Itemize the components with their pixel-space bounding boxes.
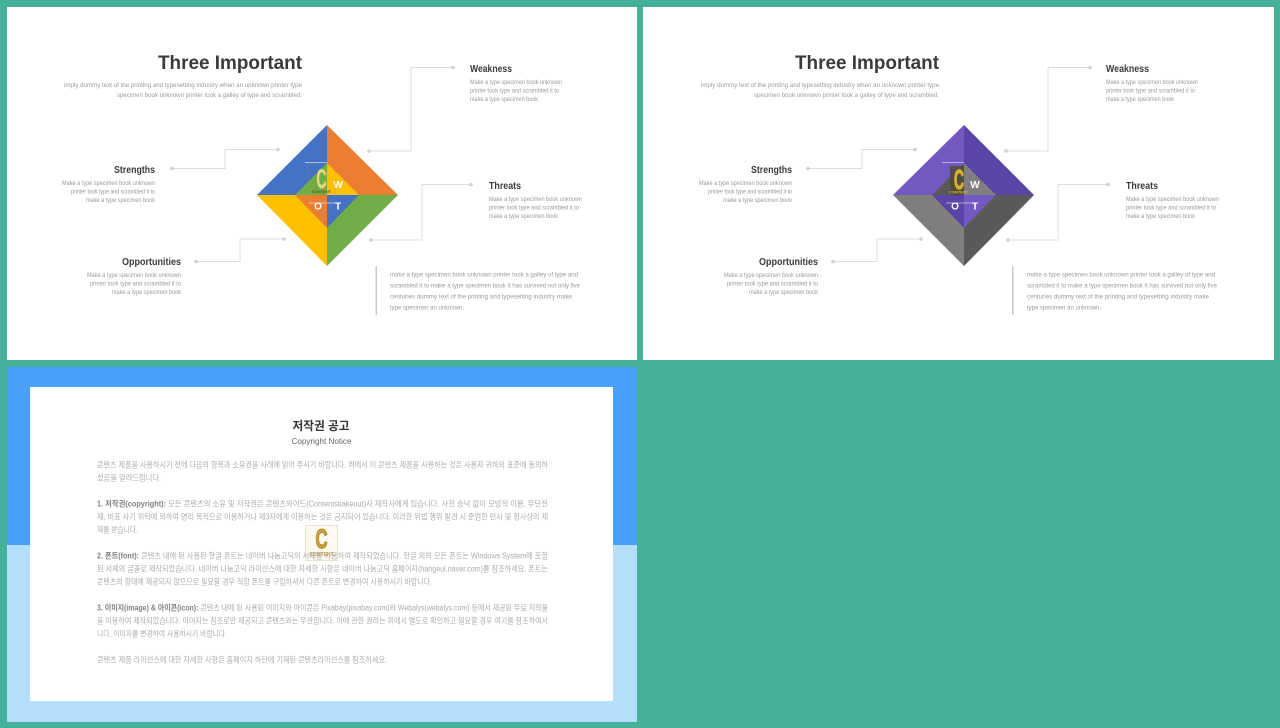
connector: weakness	[1004, 66, 1092, 153]
watermark logo: CONTENT	[309, 552, 334, 558]
notice body text: 니다. 이미지를 변경하여 사용하시기 바랍니다.	[97, 628, 227, 638]
watermark logo	[942, 162, 973, 203]
connector: strengths	[806, 148, 917, 170]
label: Weakness	[1106, 64, 1198, 103]
watermark logo: CONTENT	[949, 190, 969, 194]
note with side rule: scrambled it to make a type specimen book It has survived not only five	[1027, 282, 1217, 290]
panel: colourful SWOT slide	[7, 7, 637, 360]
label: Threats	[1126, 181, 1219, 220]
note with side rule: type specimen an unknown.	[1027, 304, 1101, 312]
connector: opportunities	[194, 237, 286, 263]
label: Threats: Threats	[489, 181, 521, 192]
notice body text: 재, 비표 사기 위탁에 의하여 영리 목적으로 이용하거나 제3자에게 이용하는 것은 금지되어 있습니다. 이러한 위법 행위 발견 시 준엄한 민사 및 형사상의 제	[97, 512, 548, 522]
intro text: imply dummy text of the printing and typesetting industry when an unknown printer type	[701, 82, 939, 89]
SWOT diamond	[893, 125, 1034, 266]
connector: opportunities	[831, 237, 923, 263]
connector: threats	[1006, 183, 1110, 242]
intro text: specimen book unknown printer took a galley of type and scrambled.	[754, 92, 939, 99]
label: Strengths: make a type specimen book	[723, 197, 793, 204]
notice body text: 1. 저작권(copyright): 모든 콘텐츠의 소유 및 저작권은 콘텐츠와이드(Contentstiakeout)사 제작사에게 있습니다. 사전 승낙 없이 모방적 이용, 무단전	[97, 498, 548, 508]
note with side rule: make a type specimen book unknown printer took a galley of type and	[390, 272, 578, 278]
intro text	[701, 82, 939, 99]
label: Threats	[489, 181, 582, 220]
label: Opportunities	[724, 257, 819, 296]
heading: Three Important: Three Important	[158, 53, 303, 74]
label: Opportunities: Opportunities	[759, 257, 818, 268]
SWOT diamond	[257, 125, 398, 266]
label: Opportunities: Make a type specimen book unknown	[87, 272, 181, 279]
connector: weakness	[367, 66, 455, 153]
label: Threats: make a type specimen book	[1126, 213, 1196, 220]
intro text	[64, 82, 302, 99]
letter O: O	[314, 202, 322, 212]
connector: strengths	[170, 148, 280, 170]
label: Strengths: printer took type and scrambled it to	[71, 188, 155, 196]
label: Strengths: make a type specimen book	[86, 197, 156, 204]
label: Threats: printer took type and scrambled it to	[1126, 204, 1216, 212]
watermark logo: C	[316, 524, 328, 554]
label: Strengths: printer took type and scrambled it to	[708, 188, 792, 196]
notice body text: 2. 폰트(font): 콘텐츠 내에 된 사용된 한글 폰트는 네이버 나눔고딕의 서체를 사용하여 제작되었습니다. 한글 외의 모든 폰트는 Windows System에 포함	[97, 550, 549, 560]
notice body text: 콘텐츠 제품을 사용하시기 전에 다음의 항목과 소유권을 사례에 읽어 주시기 바랍니다. 위에서 이 콘텐츠 제품을 사용하는 것은 사용자 귀하의 표준에 동의하	[97, 460, 549, 470]
heading: Three Important: Three Important	[795, 53, 940, 74]
label: Opportunities: printer took type and scrambled it to	[90, 280, 181, 288]
watermark logo: C	[954, 164, 964, 195]
note with side rule	[1012, 266, 1217, 315]
label: Strengths	[62, 165, 156, 204]
label: Weakness: printer took type and scrambled it to	[470, 88, 559, 94]
label: Threats: Make a type specimen book unknown	[1126, 196, 1219, 203]
note with side rule: type specimen an unknown.	[390, 304, 464, 312]
letter T: T	[335, 202, 341, 212]
label: Opportunities: make a type specimen book	[749, 289, 819, 296]
label: Weakness: make a type specimen book	[1106, 96, 1175, 103]
watermark logo: CONTENT	[312, 189, 332, 194]
label: Opportunities: Make a type specimen book unknown	[724, 272, 818, 279]
watermark logo: C	[316, 164, 326, 194]
subheading: Copyright Notice: Copyright Notice	[292, 436, 352, 446]
label: Threats: Threats	[1126, 181, 1158, 192]
watermark logo	[305, 162, 336, 203]
label: Strengths: Make a type specimen book unknown	[62, 180, 155, 187]
heading: copyright notice Korean: 저작권 공고	[292, 418, 350, 433]
label: Weakness: Weakness	[470, 64, 512, 75]
note with side rule	[376, 266, 580, 315]
label: Threats: printer took type and scrambled it to	[489, 204, 579, 212]
note with side rule: make a type specimen book unknown printer took a galley of type and	[1027, 272, 1215, 278]
intro text: imply dummy text of the printing and typesetting industry when an unknown printer type	[64, 82, 302, 89]
label: Strengths: Strengths	[114, 165, 155, 176]
panel: purple and grey SWOT slide	[643, 7, 1274, 360]
label: Strengths: Strengths	[751, 165, 792, 176]
letter T: T	[972, 202, 978, 212]
label: Opportunities	[87, 257, 182, 296]
connector: threats	[369, 183, 473, 242]
note with side rule: scrambled it to make a type specimen book It has survived not only five	[390, 282, 580, 290]
label: Weakness: make a type specimen book	[470, 96, 539, 103]
watermark logo	[306, 524, 338, 560]
letter W: W	[333, 180, 343, 191]
notice body text: 된 서체의 글꼴로 제작되었습니다. 네이버 나눔고딕 라이선스에 대한 자세한 사항은 네이버 나눔고딕 홈페이지(hangeul.naver.com)를 참조하세요. 폰트는	[97, 564, 548, 574]
notice body text: 3. 이미지(image) & 아이콘(icon): 콘텐츠 내에 된 사용된 이미지와 아이콘은 Pixabay(pixabay.com)와 Webalys(webalys.com) 등에서 제공된 무료 저작물	[97, 602, 548, 612]
panel: copyright notice slide	[7, 367, 637, 722]
label: Weakness: Make a type specimen book unknown	[470, 79, 562, 86]
label: Weakness: printer took type and scrambled it to	[1106, 88, 1195, 94]
label: Threats: Make a type specimen book unknown	[489, 196, 582, 203]
label: Weakness: Weakness	[1106, 64, 1149, 75]
label: Opportunities: make a type specimen book	[112, 289, 182, 296]
notice body text	[97, 460, 549, 664]
label: Strengths	[699, 165, 793, 204]
notice body text: 을 이용하여 제작되었습니다. 이미지는 참조로만 제공되고 콘텐츠와는 무관합니다. 이에 관한 권리는 위에서 별도로 확인하고 필요할 경우 여기를 참조하여서	[97, 616, 548, 626]
notice body text: 콘텐츠 제품 라이선스에 대한 자세한 사항은 홈페이지 하단에 기재된 콘텐츠라이선스를 참조하세요.	[97, 654, 387, 664]
label: Weakness: Make a type specimen book unknown	[1106, 79, 1198, 86]
notice body text: 콘텐츠의 형태에 제공되지 않으므로 필요할 경우 적합 폰트를 구입하셔서 다른 폰트로 변경하여 사용하시기 바랍니다.	[97, 576, 432, 586]
label: Opportunities: Opportunities	[122, 257, 181, 268]
intro text: specimen book unknown printer took a galley of type and scrambled.	[117, 92, 302, 99]
label: Strengths: Make a type specimen book unknown	[699, 180, 792, 187]
label: Threats: make a type specimen book	[489, 213, 559, 220]
note with side rule: centuries dummy text of the printing and typesetting industry make	[390, 294, 572, 300]
label: Opportunities: printer took type and scrambled it to	[727, 280, 818, 288]
notice body text: 재를 받습니다.	[97, 524, 138, 534]
label: Weakness	[470, 64, 562, 103]
letter W: W	[970, 180, 980, 191]
note with side rule: centuries dummy text of the printing and typesetting industry make	[1027, 294, 1209, 300]
notice body text: 셨음을 알려드립니다.	[97, 472, 161, 482]
letter O: O	[951, 202, 959, 212]
